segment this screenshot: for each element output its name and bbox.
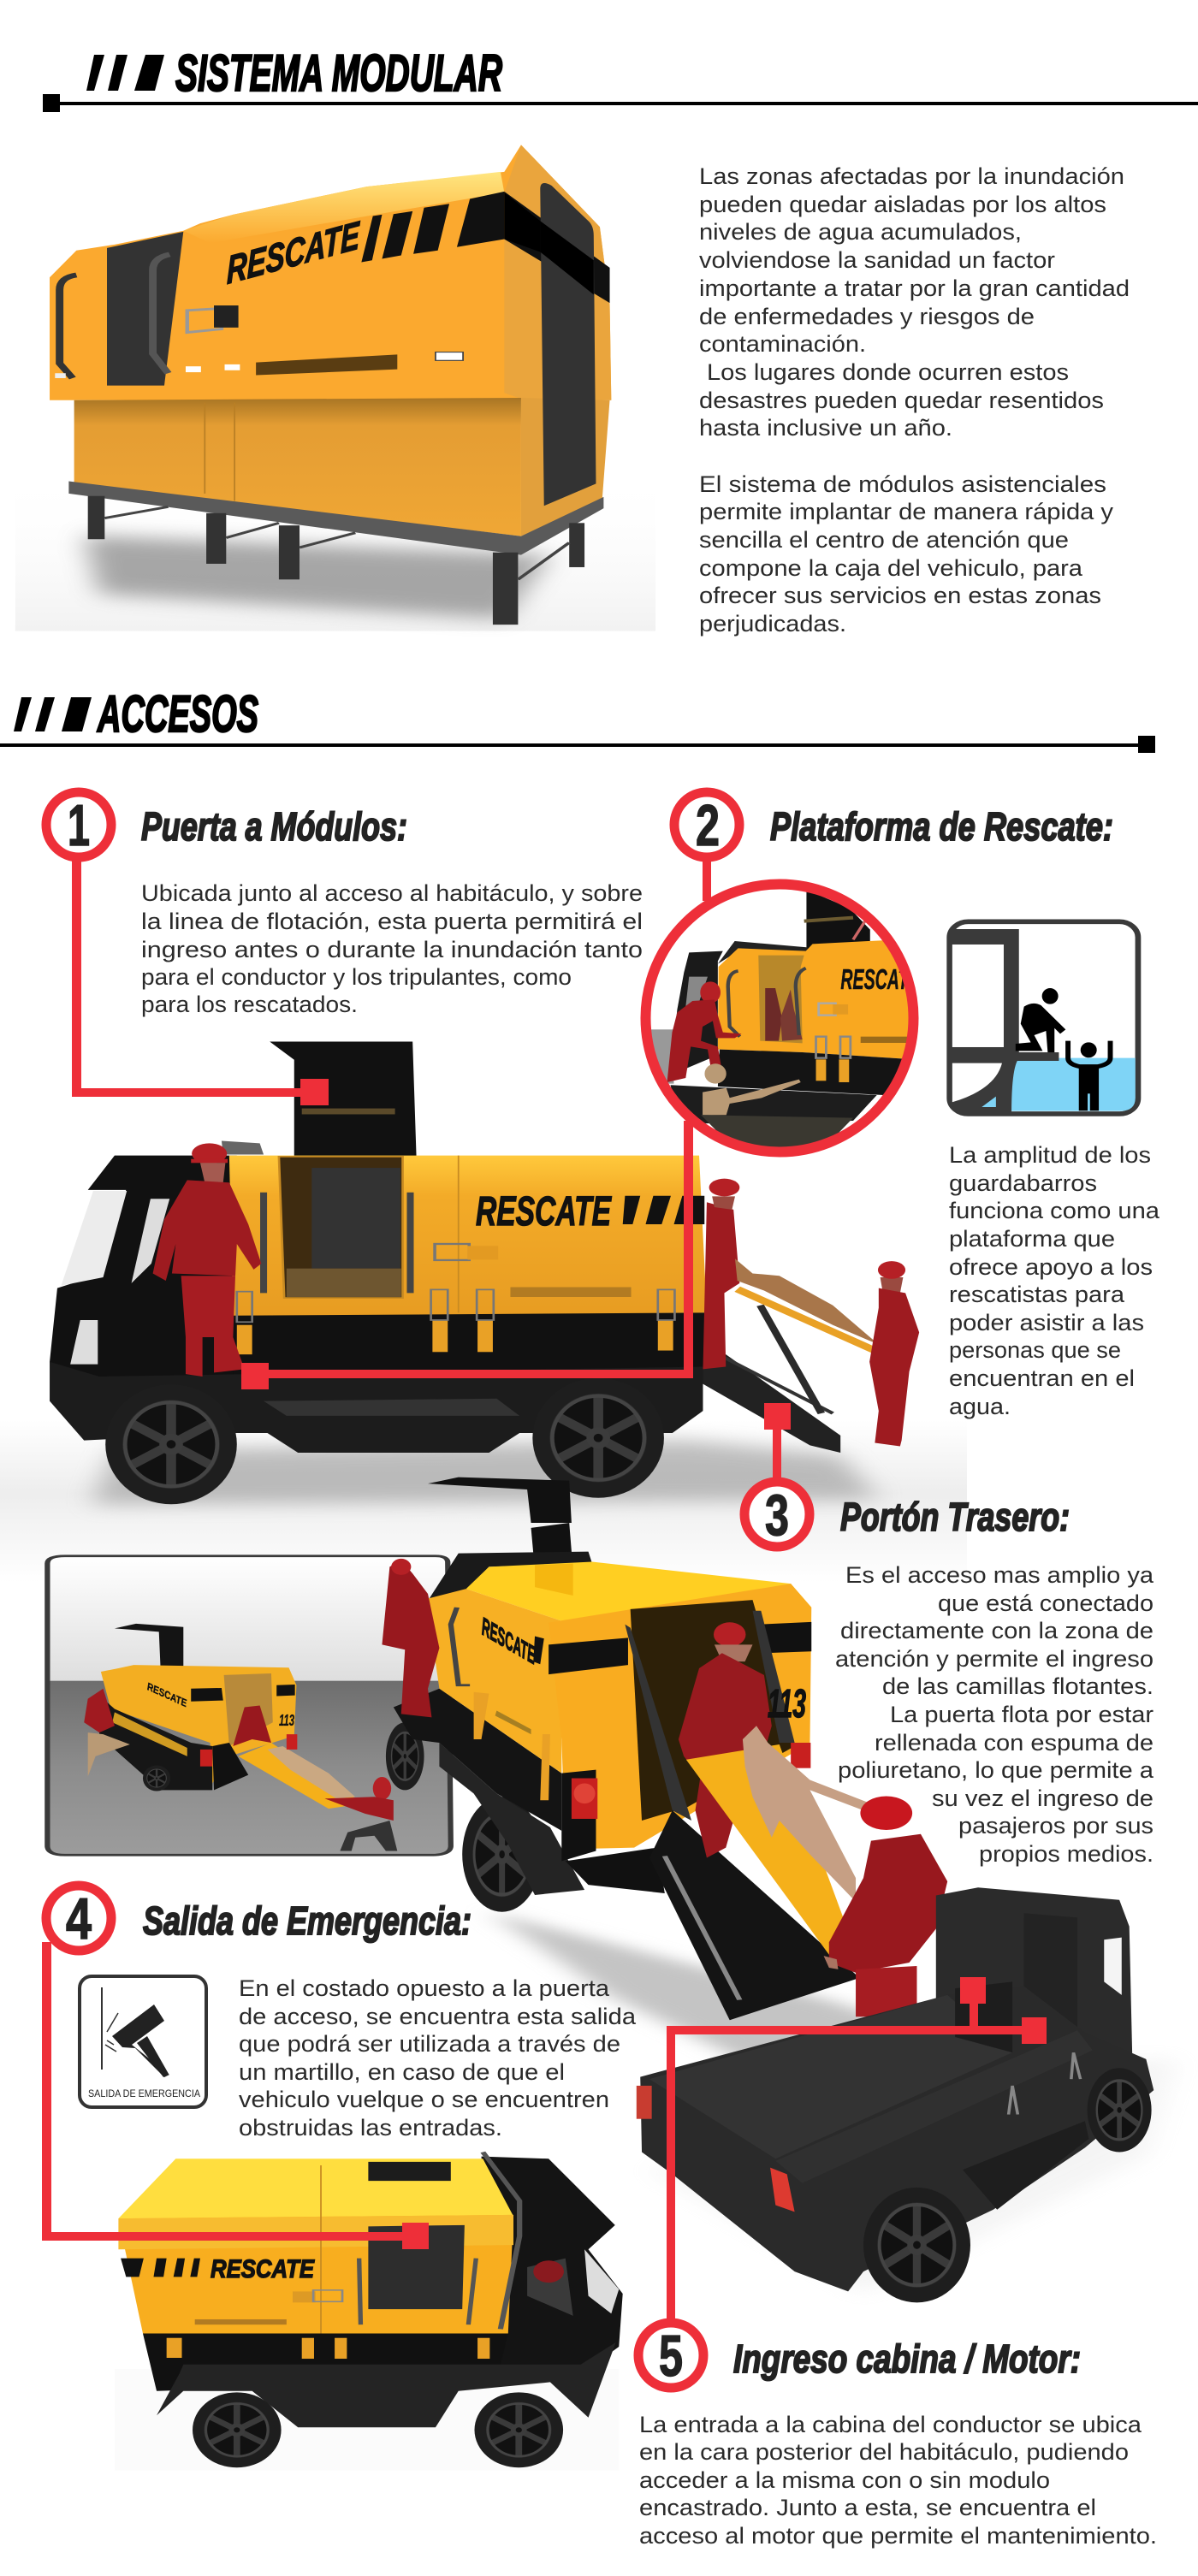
- text block: intro: Los lugares donde ocurren estos: [707, 359, 1069, 385]
- text block: plataforma: poder asistir a las: [949, 1310, 1144, 1335]
- heading: puerta a modulos: Puerta a Módulos:: [141, 804, 407, 849]
- text block: plataforma: agua.: [949, 1394, 1011, 1419]
- illustration: black truck without module: [637, 1887, 1177, 2302]
- text block: intro: volviendose la sanidad un factor: [699, 247, 1055, 273]
- text block: intro: El sistema de módulos asistenciales: [699, 471, 1106, 497]
- text block: ingreso cabina: encastrado. Junto a esta, se encuentra el: [639, 2495, 1096, 2520]
- connector 4: [42, 1942, 429, 2249]
- text block: porton trasero: [835, 1562, 1154, 1867]
- text block: salida de emergencia: En el costado opuesto a la puerta: [239, 1975, 610, 2001]
- connector 3: [764, 1403, 791, 1480]
- text block: puerta a modulos: ingreso antes o durante la inundación tanto: [141, 937, 643, 962]
- text block: puerta a modulos: [141, 880, 643, 1017]
- text block: intro: contaminación.: [699, 331, 866, 357]
- text block: puerta a modulos: Ubicada junto al acceso al habitáculo, y sobre: [141, 880, 643, 906]
- text block: intro: importante a tratar por la gran cantidad: [699, 275, 1130, 301]
- heading: salida de emergencia: Salida de Emergencia:: [143, 1898, 471, 1943]
- floor shading behind trucks: [0, 1420, 967, 1583]
- text block: porton trasero: La puerta flota por estar: [890, 1702, 1154, 1727]
- inset photo: rescue scene in water: [47, 1556, 451, 1855]
- text block: porton trasero: su vez el ingreso de: [932, 1785, 1154, 1811]
- heading: accesos: ACCESOS: [97, 685, 258, 743]
- title: sistema modular: [43, 44, 1198, 112]
- label: rescate on side truck: RESCATE: [476, 1189, 612, 1235]
- illustration: truck side view: [50, 1042, 919, 1523]
- icon: emergency hammer: [80, 1976, 206, 2107]
- text block: plataforma: guardabarros: [949, 1170, 1097, 1196]
- text block: ingreso cabina: acceso al motor que permite el mantenimiento.: [639, 2523, 1157, 2549]
- illustration: rear view truck: [382, 1523, 947, 2071]
- text block: porton trasero: atención y permite el ingreso: [835, 1646, 1154, 1672]
- text block: intro: hasta inclusive un año.: [699, 415, 952, 441]
- text block: salida de emergencia: un martillo, en caso de que el: [239, 2059, 565, 2085]
- figure: rescuer at ramp: [703, 1179, 739, 1369]
- figure: rescuer standing: [153, 1143, 261, 1377]
- figure: rescuer holding stretcher: [869, 1261, 919, 1446]
- text block: plataforma: funciona como una: [949, 1198, 1160, 1223]
- text block: intro: desastres pueden quedar resentidos: [699, 388, 1104, 413]
- text block: plataforma: [949, 1142, 1160, 1419]
- rear door top of next truck: [428, 1477, 572, 1523]
- callout ring: circle 2 inset: [645, 885, 914, 1152]
- text block: intro: compone la caja del vehiculo, para: [699, 555, 1083, 581]
- text block: plataforma: personas que se: [949, 1337, 1121, 1363]
- text block: ingreso cabina: acceder a la misma con o sin modulo: [639, 2467, 1050, 2493]
- connector 1: [72, 856, 329, 1105]
- text block: plataforma: ofrece apoyo a los: [949, 1254, 1153, 1280]
- text block: salida de emergencia: [239, 1975, 637, 2141]
- text block: intro: pueden quedar aisladas por los altos: [699, 192, 1106, 217]
- illustration: rescue module: [15, 145, 655, 631]
- icon: emergency hammer: SALIDA DE EMERGENCIA: [88, 2087, 200, 2099]
- badge 3: [744, 1482, 810, 1548]
- heading: porton trasero: Portón Trasero:: [840, 1495, 1070, 1539]
- text block: puerta a modulos: para el conductor y los tripulantes, como: [141, 964, 572, 990]
- label: rescate on small truck: RESCATE: [147, 1680, 187, 1710]
- inset: rescue platform detail: RESCAT: [840, 963, 910, 995]
- text block: porton trasero: que está conectado: [938, 1590, 1154, 1616]
- text block: puerta a modulos: la linea de flotación, esta puerta permitirá el: [141, 909, 643, 934]
- text block: ingreso cabina: La entrada a la cabina del conductor se ubica: [639, 2412, 1142, 2437]
- text block: plataforma: plataforma que: [949, 1226, 1115, 1252]
- text block: plataforma: encuentran en el: [949, 1365, 1135, 1391]
- text block: porton trasero: Es el acceso mas amplio ya: [845, 1562, 1154, 1588]
- text block: salida de emergencia: de acceso, se encuentra esta salida: [239, 2004, 637, 2029]
- text block: plataforma: rescatistas para: [949, 1282, 1125, 1307]
- text block: ingreso cabina: en la cara posterior del habitáculo, pudiendo: [639, 2439, 1129, 2465]
- badge 2: [674, 792, 739, 858]
- text block: porton trasero: pasajeros por sus: [958, 1813, 1154, 1839]
- label: rescate on front truck: RESCATE: [211, 2255, 315, 2283]
- text block: intro: de enfermedades y riesgos de: [699, 304, 1035, 329]
- text block: intro: Las zonas afectadas por la inundación: [699, 163, 1124, 189]
- text block: puerta a modulos: para los rescatados.: [141, 992, 358, 1017]
- text block: salida de emergencia: obstruidas las entradas.: [239, 2115, 502, 2141]
- connector 5: [667, 1977, 1047, 2320]
- text block: intro: [699, 163, 1130, 637]
- connector 2: [241, 860, 711, 1389]
- text block: intro: sencilla el centro de atención que: [699, 527, 1069, 553]
- text block: porton trasero: directamente con la zona de: [840, 1618, 1154, 1643]
- text block: intro: perjudicadas.: [699, 611, 846, 637]
- text block: plataforma: La amplitud de los: [949, 1142, 1151, 1168]
- badge 3: 3: [765, 1483, 789, 1548]
- inset: rescue platform detail: [646, 884, 914, 1152]
- badge 2: 2: [696, 793, 720, 858]
- text block: salida de emergencia: vehiculo vuelque o se encuentren: [239, 2087, 609, 2112]
- title: sistema modular: SISTEMA MODULAR: [175, 44, 502, 102]
- text block: porton trasero: rellenada con espuma de: [875, 1730, 1154, 1756]
- label: rescate on module: RESCATE: [227, 213, 360, 293]
- badge 1: 1: [68, 793, 90, 858]
- illustration: truck front quarter view: [115, 2152, 623, 2471]
- badge 1: [46, 792, 111, 858]
- badge 4: 4: [66, 1886, 92, 1951]
- label: 113: 113: [768, 1681, 806, 1726]
- text block: intro: niveles de agua acumulados,: [699, 219, 1022, 245]
- text block: ingreso cabina: [639, 2412, 1157, 2549]
- text block: porton trasero: poliuretano, lo que permite a: [838, 1757, 1154, 1783]
- text block: salida de emergencia: que podrá ser utilizada a través de: [239, 2031, 620, 2057]
- label: 113 on small truck: 113: [279, 1712, 294, 1729]
- text block: intro: permite implantar de manera rápida y: [699, 499, 1114, 524]
- heading: ingreso cabina: Ingreso cabina / Motor:: [733, 2336, 1081, 2381]
- icon: platform pictogram: [950, 921, 1138, 1114]
- text: RESCATE: [482, 1611, 536, 1671]
- badge 5: [638, 2323, 703, 2389]
- text block: intro: ofrecer sus servicios en estas zonas: [699, 583, 1101, 608]
- badge 5: 5: [659, 2324, 683, 2389]
- text block: porton trasero: de las camillas flotantes.: [882, 1673, 1154, 1699]
- text block: porton trasero: propios medios.: [979, 1841, 1154, 1867]
- heading: accesos: [0, 685, 1155, 753]
- badge 4: [46, 1886, 111, 1951]
- heading: plataforma: Plataforma de Rescate:: [770, 804, 1113, 849]
